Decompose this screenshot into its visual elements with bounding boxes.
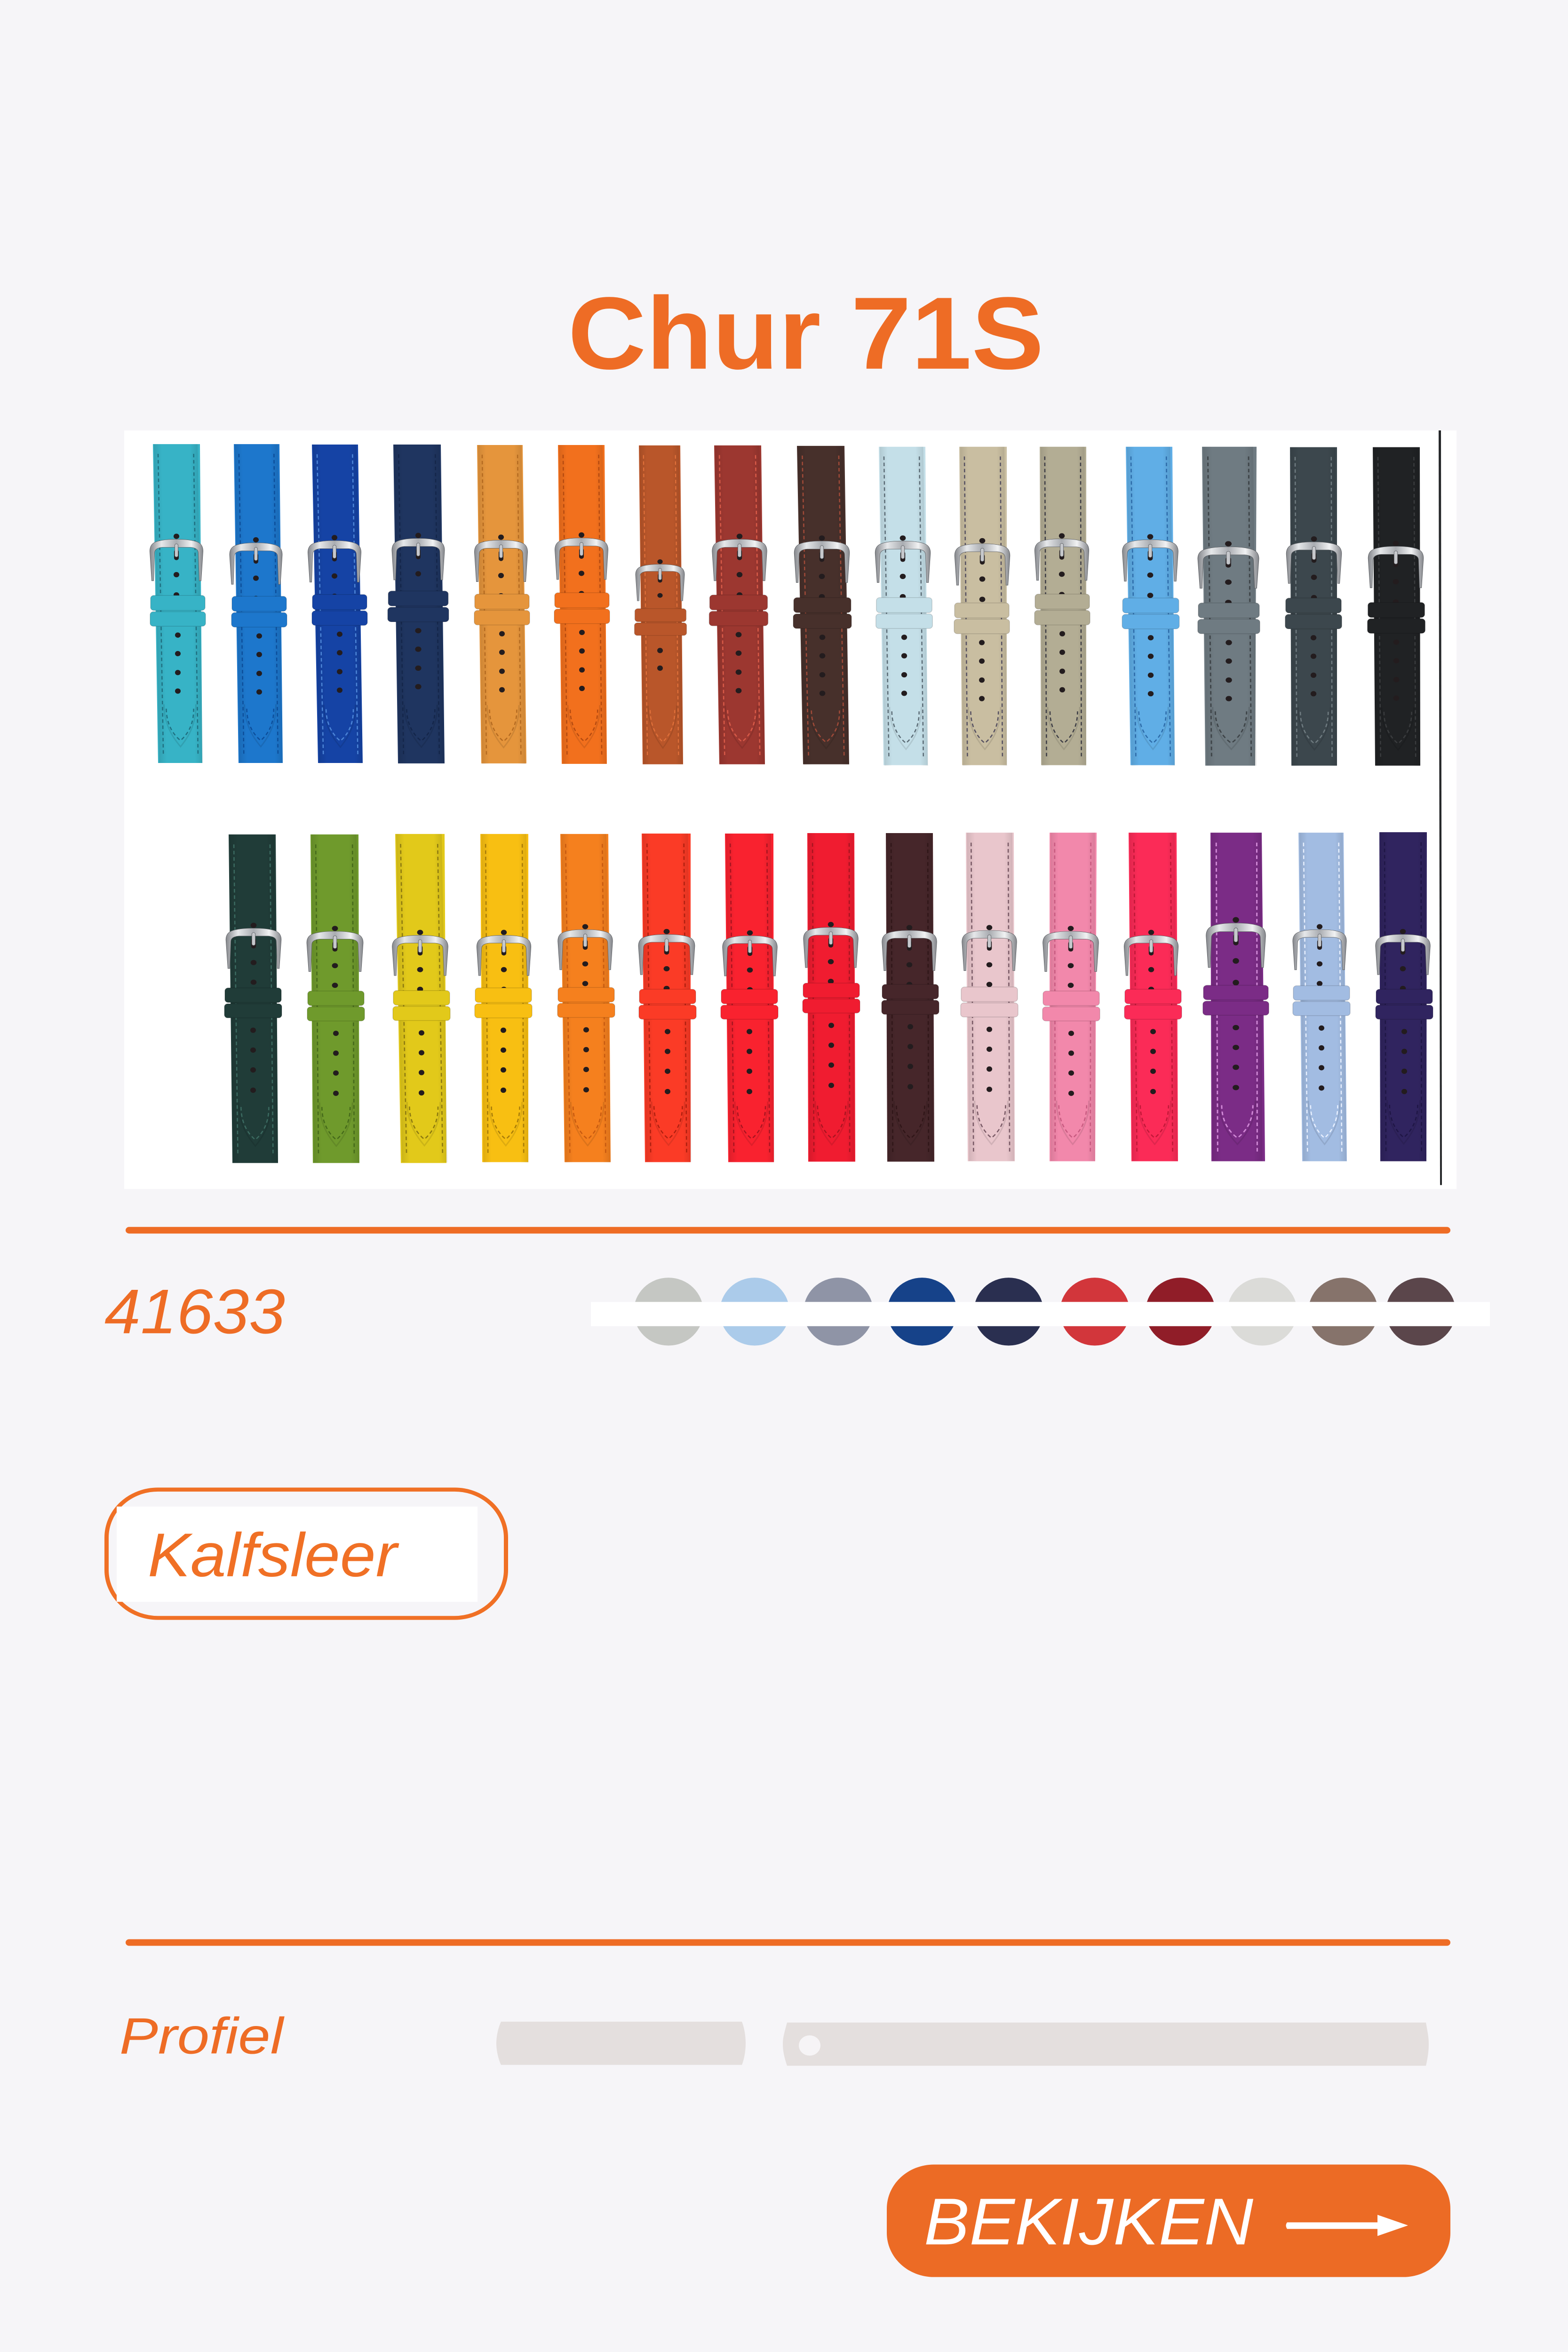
strap 26: pale pink xyxy=(961,833,1018,1161)
strap 27: pink xyxy=(1043,833,1100,1161)
material tag: Kalfsleer xyxy=(148,1520,399,1589)
strap 9: dark brown xyxy=(793,446,852,765)
strap 12: khaki xyxy=(1035,447,1090,766)
strap 15: dark slate xyxy=(1285,447,1342,766)
strap 10: pale blue xyxy=(875,447,932,766)
strap 11: beige xyxy=(954,447,1010,766)
strap 13: sky blue xyxy=(1122,447,1179,766)
strap 5: ochre orange xyxy=(474,445,530,764)
strap 28: hot pink xyxy=(1124,833,1182,1161)
profile label: Profiel xyxy=(119,2007,285,2064)
title: Chur 71S xyxy=(568,276,1044,390)
strap 7: cognac xyxy=(635,445,686,764)
strap 23: red xyxy=(721,834,778,1162)
colour swatches xyxy=(591,1278,1490,1345)
profile bar left xyxy=(496,2022,746,2065)
strap 8: brick red xyxy=(709,445,768,764)
article number: 41633 xyxy=(104,1277,285,1347)
strap 1: teal xyxy=(150,444,206,763)
divider rule top xyxy=(126,1227,1450,1233)
strap 20: golden yellow xyxy=(475,834,532,1162)
strap 22: red orange xyxy=(638,834,696,1162)
strap 18: green xyxy=(307,834,365,1163)
panel: product photo of watch straps xyxy=(124,430,1457,1189)
strap 14: grey xyxy=(1198,447,1260,766)
strap 21: bright orange xyxy=(557,834,615,1162)
strap 3: royal blue xyxy=(308,445,367,763)
strap 31: dark indigo xyxy=(1376,832,1433,1161)
strap 2: blue xyxy=(230,444,287,763)
strap 6: orange xyxy=(554,445,610,764)
strap 30: periwinkle xyxy=(1293,833,1350,1161)
profile bar right with dot xyxy=(783,2023,1429,2066)
strap 29: purple xyxy=(1203,833,1269,1161)
strap 25: maroon brown xyxy=(882,833,939,1162)
strap 16: black xyxy=(1368,447,1425,766)
strap 17: dark green xyxy=(224,834,282,1163)
icon: arrow xyxy=(1286,2215,1408,2236)
divider rule bottom xyxy=(126,1939,1450,1946)
strap 24: crimson xyxy=(803,833,860,1162)
material tag xyxy=(106,1490,506,1618)
button: bekijken: BEKIJKEN xyxy=(924,2185,1254,2258)
strap 19: lemon yellow xyxy=(392,834,450,1163)
strap 4: navy xyxy=(388,445,449,763)
button: bekijken xyxy=(887,2165,1450,2277)
